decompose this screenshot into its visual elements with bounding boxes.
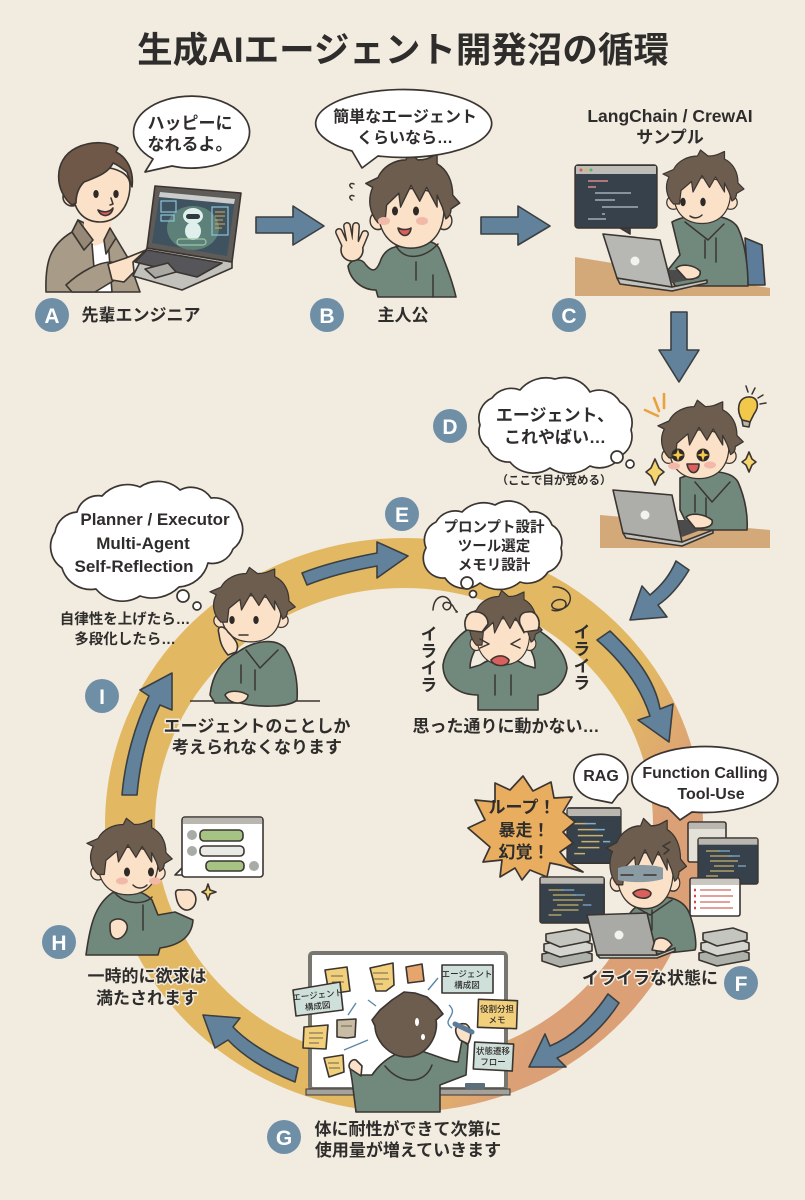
chat window (175, 817, 263, 877)
text: what if: 多段化したら… (74, 630, 176, 648)
panel C: sample code (552, 106, 770, 332)
chair (745, 238, 765, 285)
caption H: 一時的に欲求は (88, 966, 206, 986)
thought cloud: this is crazy (479, 378, 634, 474)
thought cloud: planner: Multi-Agent (96, 534, 190, 553)
speech bubble: happy (134, 96, 250, 172)
label D (433, 409, 467, 443)
arrow C to D (659, 312, 699, 382)
heading: LangChain sample (587, 106, 753, 147)
caption I (164, 717, 350, 757)
note: state flow: 状態遷移 (476, 1046, 510, 1056)
caption F: イライラな状態に (582, 969, 718, 988)
icon: sparkle left (646, 459, 664, 485)
cycle ring (130, 563, 678, 1087)
speech bubble: RAG (574, 754, 628, 803)
text: what if (60, 610, 190, 648)
heading: LangChain sample: LangChain / CrewAI (587, 106, 753, 126)
note: agent diagram left: エージェント (292, 987, 343, 1003)
window: error list (690, 878, 740, 916)
label G (267, 1120, 301, 1154)
label E: E (395, 504, 409, 527)
panel H: satisfied (42, 817, 263, 1008)
thought cloud: prompt design (423, 501, 562, 598)
desk (600, 515, 770, 548)
character: protagonist from behind (349, 992, 472, 1112)
speech bubble: function calling: Function Calling (642, 765, 768, 782)
panel E: frustration (385, 497, 600, 736)
speech bubble: happy: なれるよ。 (148, 135, 232, 154)
speech bubble: easy agent: くらいなら… (357, 129, 453, 147)
character: protagonist fist pump (86, 818, 196, 955)
label I (85, 679, 119, 713)
caption E: 思った通りに動かない… (412, 717, 600, 736)
caption G: 使用量が増えていきます (315, 1140, 501, 1160)
arrow A to B (256, 206, 324, 245)
speech bubble: happy: ハッピーに (148, 114, 232, 133)
arrow I to E (302, 542, 408, 585)
panel D: awakening (433, 378, 770, 548)
arrow G to H (203, 1015, 298, 1082)
burst: loop runaway hallucination: ループ！ (489, 798, 555, 817)
laptop (613, 490, 713, 546)
vertical text left: irritated: イライラ (418, 625, 436, 693)
caption G (314, 1119, 502, 1160)
label F: F (735, 973, 748, 996)
note: agent diagram right (442, 965, 493, 993)
note: role memo: 役割分担 (480, 1004, 514, 1014)
thought cloud: prompt design: プロンプト設計 (443, 519, 545, 536)
arrow E to F (597, 631, 673, 742)
speech bubble: easy agent: 簡単なエージェント (333, 107, 477, 126)
books right (699, 928, 749, 966)
caption G: 体に耐性ができて次第に (314, 1119, 502, 1139)
character: protagonist coding (663, 150, 748, 286)
thought cloud: this is crazy: エージェント、 (496, 406, 614, 425)
label B: B (319, 305, 335, 328)
note: role memo: メモ (488, 1015, 506, 1025)
note: state flow: フロー (480, 1057, 506, 1067)
panel B: protagonist (310, 89, 492, 332)
note: agent diagram left: 構成図 (304, 1000, 331, 1012)
laptop with robot on screen (133, 186, 241, 290)
label B (310, 298, 344, 332)
vertical text right: irritated: イライラ (570, 623, 590, 691)
note: role memo (478, 999, 517, 1029)
thought cloud: planner (51, 481, 243, 610)
note: state flow (473, 1042, 514, 1071)
arrow D to F (630, 561, 689, 620)
panel G: whiteboard (267, 953, 517, 1160)
thought cloud: this is crazy: これやばい… (504, 428, 606, 447)
books left (542, 929, 592, 967)
icon: scribble right (552, 587, 570, 611)
heading: LangChain sample: サンプル (636, 128, 704, 147)
laptop (587, 913, 675, 958)
label G: G (276, 1127, 292, 1150)
character: protagonist waving (339, 152, 460, 297)
caption A: 先輩エンジニア (82, 306, 200, 325)
panel I: obsession (51, 481, 350, 757)
caption I: 考えられなくなります (172, 738, 342, 757)
caption I: エージェントのことしか (164, 717, 350, 736)
thought cloud: planner: Self-Reflection (74, 557, 194, 576)
character: senior engineer (46, 143, 146, 292)
speech bubble: function calling: Tool-Use (677, 786, 745, 803)
label H (42, 925, 76, 959)
note: wake up: （ここで目が覚める） (496, 473, 612, 487)
icon: orange sparks (645, 394, 664, 416)
character: frustrated protagonist (443, 590, 567, 710)
label A (35, 298, 69, 332)
note: agent diagram right: 構成図 (454, 980, 480, 990)
icon: sparkle (202, 884, 216, 900)
code window (575, 165, 657, 234)
title: 生成AIエージェント開発沼の循環 (137, 30, 669, 70)
sticky notes (303, 963, 424, 1077)
label C (552, 298, 586, 332)
icon: sparkle right (742, 452, 756, 472)
arrow B to C (481, 206, 550, 245)
desk (575, 257, 770, 296)
label I: I (99, 686, 105, 709)
label D: D (442, 416, 458, 439)
table line (190, 700, 320, 702)
label H: H (51, 932, 67, 955)
panel F: overload (468, 747, 778, 1000)
speech bubble: easy agent (316, 89, 492, 168)
burst: loop runaway hallucination: 暴走！ (498, 821, 550, 840)
character: exhausted protagonist (607, 818, 696, 955)
thought cloud: prompt design: ツール選定 (458, 538, 530, 555)
diagram arrows (344, 978, 452, 1050)
thought cloud: prompt design: メモリ設計 (458, 557, 531, 574)
label C: C (561, 305, 577, 328)
caption H (88, 966, 206, 1008)
burst: loop runaway hallucination: 幻覚！ (498, 843, 550, 862)
laptop (603, 234, 707, 291)
icon: scribble left (433, 597, 457, 612)
label A: A (44, 305, 60, 328)
character: protagonist sparkling eyes (658, 400, 747, 530)
caption H: 満たされます (96, 988, 198, 1008)
text: what if: 自律性を上げたら… (60, 610, 190, 628)
thought cloud: planner: Planner / Executor (80, 510, 230, 529)
speech bubble: RAG: RAG (583, 768, 619, 785)
character: protagonist thinking (210, 567, 297, 706)
note: agent diagram right: エージェント (442, 969, 492, 979)
label E (385, 497, 419, 531)
code windows background (540, 808, 758, 923)
label F (724, 966, 758, 1000)
note: agent diagram left (292, 982, 343, 1016)
arrow F to G (529, 994, 619, 1067)
whiteboard (306, 953, 510, 1095)
icon: light bulb (739, 386, 766, 427)
burst: loop runaway hallucination (468, 776, 583, 880)
speech bubble: function calling (632, 747, 778, 820)
arrow H to I (122, 673, 172, 795)
caption B: 主人公 (378, 306, 428, 325)
panel A: senior engineer (35, 96, 250, 332)
